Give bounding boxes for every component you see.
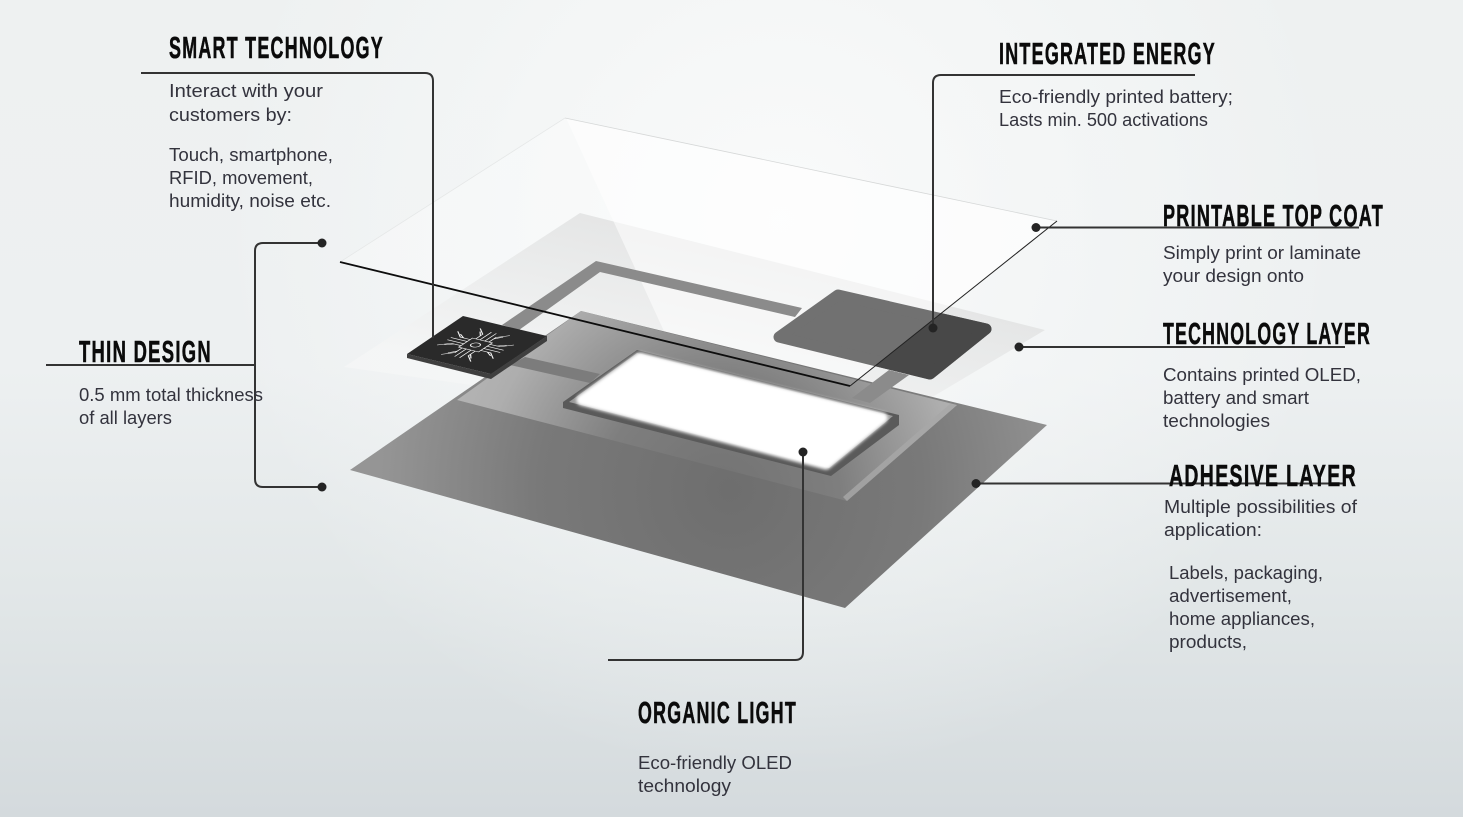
- top coat highlight: [566, 118, 1057, 386]
- smart chip: [407, 316, 547, 379]
- heading: organic light: ORGANIC LIGHT: [638, 695, 797, 730]
- heading: thin design: THIN DESIGN: [79, 334, 212, 369]
- text block: technology layer description: technologies: [1163, 410, 1270, 431]
- text block: adhesive layer description: home appliances,: [1169, 608, 1315, 629]
- text block: thin design description: of all layers: [79, 407, 172, 428]
- leader line: technology layer: [1014, 342, 1345, 352]
- icon: circuit chip: [428, 325, 523, 365]
- adhesive layer sheet: [350, 311, 1047, 608]
- text block: smart technology description: Interact with your: [169, 80, 323, 101]
- heading: smart technology: SMART TECHNOLOGY: [169, 30, 384, 65]
- text block: integrated energy description: Lasts min. 500 activations: [999, 109, 1208, 130]
- text block: smart technology description: [169, 80, 333, 211]
- text block: adhesive layer description: Labels, packaging,: [1169, 562, 1323, 583]
- panel: technology layer: [1014, 316, 1371, 431]
- top coat fill: [340, 118, 1057, 386]
- panel: printable top coat: [1032, 198, 1384, 286]
- panel: adhesive layer: [972, 458, 1358, 652]
- circuit traces: [502, 261, 909, 403]
- panel: smart technology: [141, 30, 433, 338]
- leader line: printable top coat: [1032, 223, 1359, 232]
- leader line: smart technology: [141, 73, 433, 338]
- text block: technology layer description: [1163, 364, 1361, 431]
- text block: adhesive layer description: application:: [1164, 519, 1262, 540]
- leader line: integrated energy: [928, 75, 1195, 332]
- text block: adhesive layer description: Multiple possibilities of: [1164, 496, 1358, 517]
- text block: organic light description: [638, 752, 792, 796]
- upper translucent layer: [344, 213, 1045, 440]
- text block: organic light description: Eco-friendly OLED: [638, 752, 792, 773]
- text block: printable top coat description: your design onto: [1163, 265, 1304, 286]
- panel: integrated energy: [928, 36, 1233, 332]
- printable top coat outline: [340, 118, 1057, 386]
- text block: adhesive layer description: advertisement,: [1169, 585, 1292, 606]
- OLED light panel: [563, 350, 899, 476]
- leader line: adhesive layer: [972, 479, 1345, 488]
- battery: [779, 295, 986, 374]
- heading: integrated energy: INTEGRATED ENERGY: [999, 36, 1216, 71]
- text block: printable top coat description: Simply print or laminate: [1163, 242, 1361, 263]
- leader bracket: thin design: [46, 238, 326, 492]
- text block: integrated energy description: Eco-friendly printed battery;: [999, 86, 1233, 107]
- text block: smart technology description: humidity, noise etc.: [169, 190, 331, 211]
- base layer panel: [457, 311, 957, 501]
- text block: smart technology description: customers by:: [169, 104, 292, 125]
- text block: organic light description: technology: [638, 775, 732, 796]
- text block: technology layer description: Contains printed OLED,: [1163, 364, 1361, 385]
- text block: thin design description: [79, 384, 263, 428]
- text block: integrated energy description: [999, 86, 1233, 130]
- text block: adhesive layer description: [1164, 496, 1358, 652]
- text block: smart technology description: Touch, smartphone,: [169, 144, 333, 165]
- text block: smart technology description: RFID, movement,: [169, 167, 313, 188]
- text block: thin design description: 0.5 mm total thickness: [79, 384, 263, 405]
- text block: printable top coat description: [1163, 242, 1361, 286]
- text block: technology layer description: battery and smart: [1163, 387, 1309, 408]
- text block: adhesive layer description: products,: [1169, 631, 1247, 652]
- heading: adhesive layer: ADHESIVE LAYER: [1169, 458, 1357, 493]
- panel: thin design: [46, 238, 326, 492]
- exploded layer illustration: [340, 118, 1057, 608]
- panel: organic light: [608, 448, 808, 796]
- leader line: organic light: [608, 448, 808, 660]
